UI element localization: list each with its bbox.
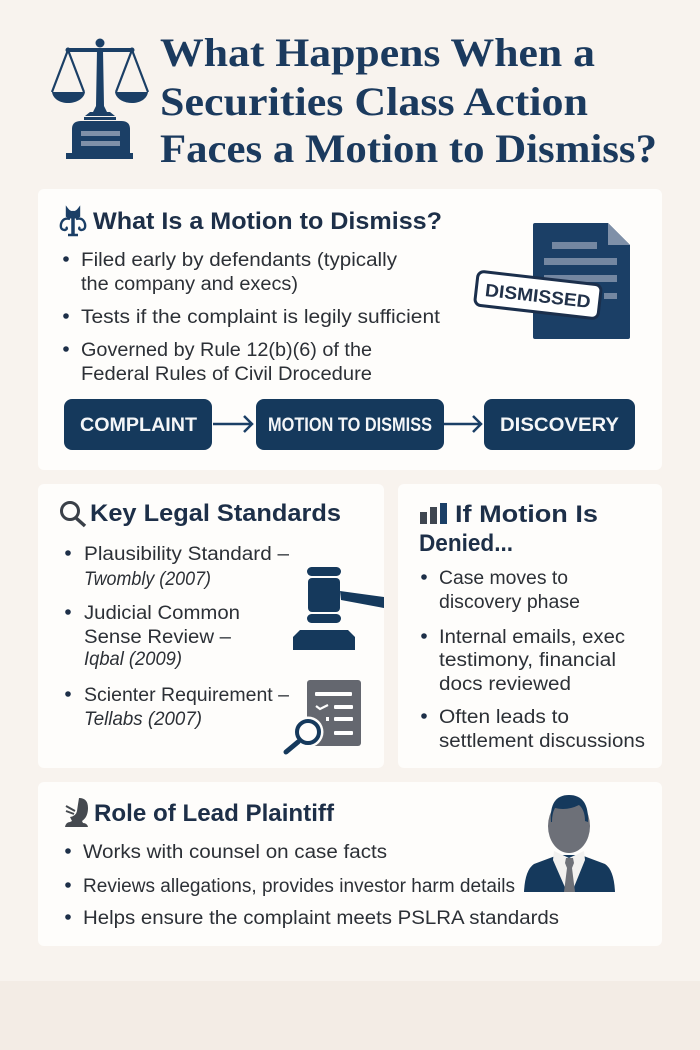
icon: dismissed document: DISMISSED bbox=[484, 280, 592, 312]
title: What Happens When a bbox=[160, 30, 595, 75]
heading: If Motion Is bbox=[455, 501, 598, 528]
panel: role of lead plaintiff bbox=[38, 782, 662, 946]
icon: dismissed document bbox=[474, 223, 630, 339]
bullet list: Governed by Rule 12(b)(6) of the bbox=[81, 340, 372, 361]
bullet list: Tellabs (2007) bbox=[84, 709, 202, 730]
title bbox=[160, 30, 657, 171]
bullet list: Judicial Common bbox=[84, 603, 240, 624]
icon: checklist with magnifier bbox=[286, 680, 361, 752]
icon: gavel bbox=[293, 567, 384, 650]
bullet list: Often leads to bbox=[439, 707, 569, 728]
bullet list: discovery phase bbox=[439, 592, 580, 613]
panel: if motion is denied bbox=[398, 484, 662, 768]
bullet list bbox=[63, 250, 441, 385]
heading: What Is a Motion to Dismiss? bbox=[93, 208, 442, 235]
bullet list: Plausibility Standard – bbox=[84, 544, 289, 565]
flow: complaint to discovery bbox=[64, 399, 635, 450]
bullet list bbox=[65, 544, 289, 730]
heading bbox=[419, 501, 598, 557]
title: Faces a Motion to Dismiss? bbox=[160, 126, 657, 171]
bullet list bbox=[65, 842, 559, 929]
bullet list: Reviews allegations, provides investor harm details bbox=[83, 876, 515, 897]
bullet list: Federal Rules of Civil Drocedure bbox=[81, 364, 372, 385]
bullet list bbox=[421, 568, 645, 752]
bullet list: Works with counsel on case facts bbox=[83, 842, 387, 863]
bullet list: Case moves to bbox=[439, 568, 568, 589]
icon: bar chart bbox=[420, 503, 447, 524]
bullet list: settlement discussions bbox=[439, 731, 645, 752]
icon: magnifying glass bbox=[62, 502, 85, 526]
bullet list: testimony, financial bbox=[439, 650, 616, 671]
bullet list: Scienter Requirement – bbox=[84, 685, 289, 706]
flow: complaint to discovery: DISCOVERY bbox=[500, 415, 619, 436]
title: Securities Class Action bbox=[160, 79, 588, 124]
panel: key legal standards bbox=[38, 484, 384, 768]
bullet list: Sense Review – bbox=[84, 627, 231, 648]
icon: lead plaintiff figure bbox=[65, 798, 88, 827]
bullet list: Internal emails, exec bbox=[439, 627, 625, 648]
icon: person in suit bbox=[524, 795, 615, 892]
heading: Role of Lead Plaintiff bbox=[94, 800, 335, 827]
icon: small scales bbox=[61, 209, 85, 235]
bullet list: Filed early by defendants (typically bbox=[81, 250, 398, 271]
bullet list: Twombly (2007) bbox=[84, 569, 211, 590]
bullet list: Iqbal (2009) bbox=[84, 649, 182, 670]
panel: what is a motion to dismiss bbox=[38, 189, 662, 470]
bullet list: Tests if the complaint is legily sufficient bbox=[81, 307, 441, 328]
bullet list: Helps ensure the complaint meets PSLRA standards bbox=[83, 908, 559, 929]
heading: Denied... bbox=[419, 530, 513, 557]
flow: complaint to discovery: MOTION TO DISMISS bbox=[268, 415, 432, 436]
flow: complaint to discovery: COMPLAINT bbox=[80, 415, 197, 436]
bullet list: docs reviewed bbox=[439, 674, 571, 695]
icon: scales of justice bbox=[52, 38, 148, 159]
heading: Key Legal Standards bbox=[90, 500, 341, 527]
bullet list: the company and execs) bbox=[81, 274, 298, 295]
